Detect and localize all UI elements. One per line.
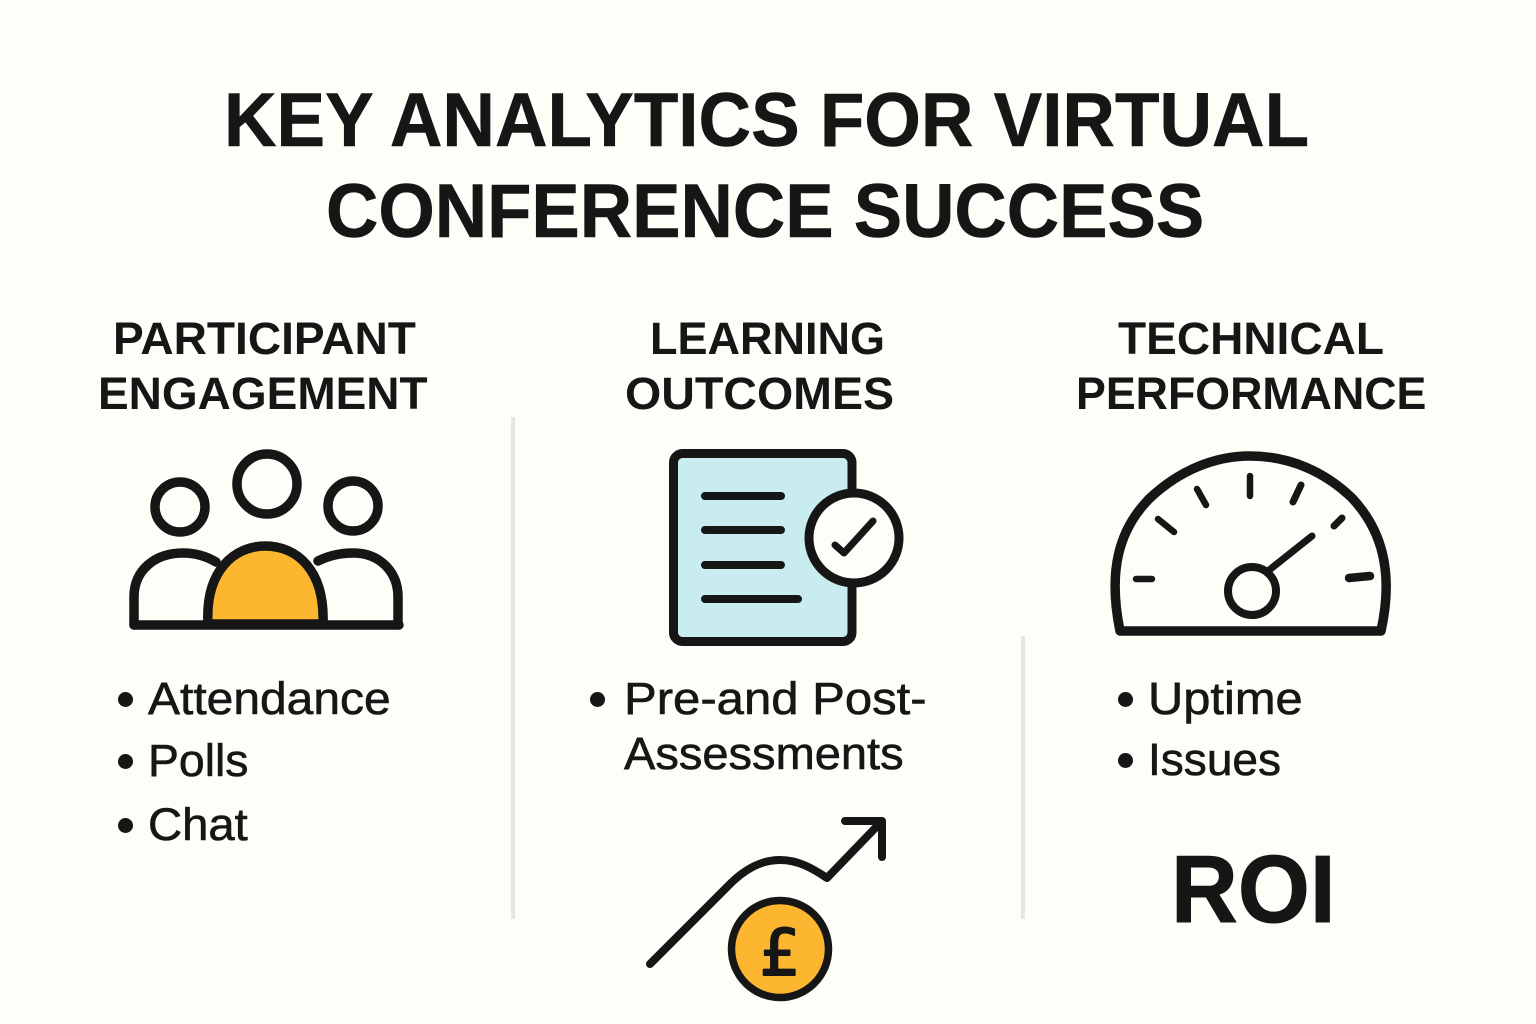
list: learning outcomes: Pre-and Post- [624,673,927,724]
list: learning outcomes: Assessments [624,728,904,779]
list: technical performance: Issues [1148,734,1281,785]
heading: learning outcomes: OUTCOMES [625,368,894,419]
list: participant engagement: Polls [148,735,248,786]
heading: technical performance: PERFORMANCE [1076,368,1426,419]
list: participant engagement: Chat [148,799,248,850]
list: learning outcomes [590,673,927,779]
heading: technical performance: TECHNICAL [1118,313,1384,364]
list: participant engagement: Attendance [148,673,391,724]
icon: growth arrow with pound coin [646,817,886,1002]
title: KEY ANALYTICS FOR VIRTUAL [224,78,1309,163]
title [224,78,1309,254]
icon: speedometer gauge [1110,451,1391,636]
title: CONFERENCE SUCCESS [326,169,1204,254]
heading: participant engagement: ENGAGEMENT [98,368,428,419]
list: participant engagement [118,673,391,850]
heading: participant engagement [98,313,428,419]
list: technical performance [1118,673,1303,785]
heading: learning outcomes [625,313,894,419]
list: technical performance: Uptime [1148,673,1303,724]
icon: document with check [669,449,904,646]
heading: participant engagement: PARTICIPANT [113,313,416,364]
heading: technical performance [1076,313,1426,419]
roi label: ROI [1171,836,1336,943]
icon: growth arrow with pound coin: £ [760,917,800,991]
icon: people group [129,449,404,630]
heading: learning outcomes: LEARNING [650,313,885,364]
